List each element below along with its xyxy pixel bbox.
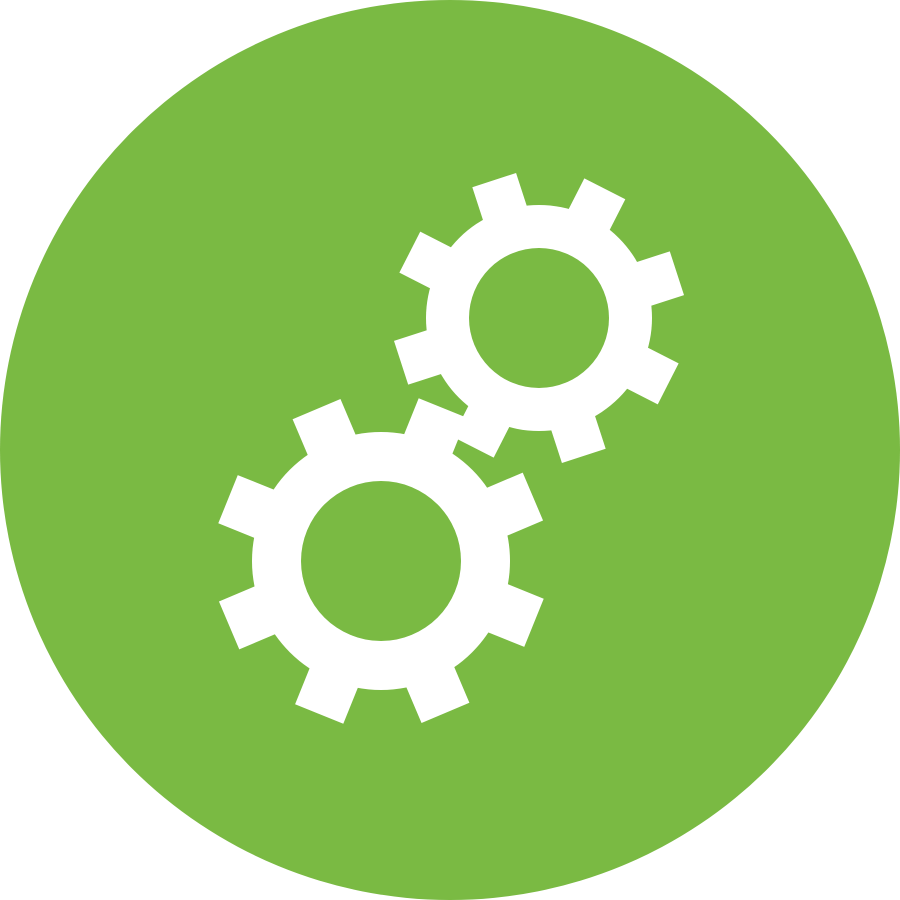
icon: small gear <box>394 173 684 463</box>
icon: large gear <box>218 398 544 724</box>
